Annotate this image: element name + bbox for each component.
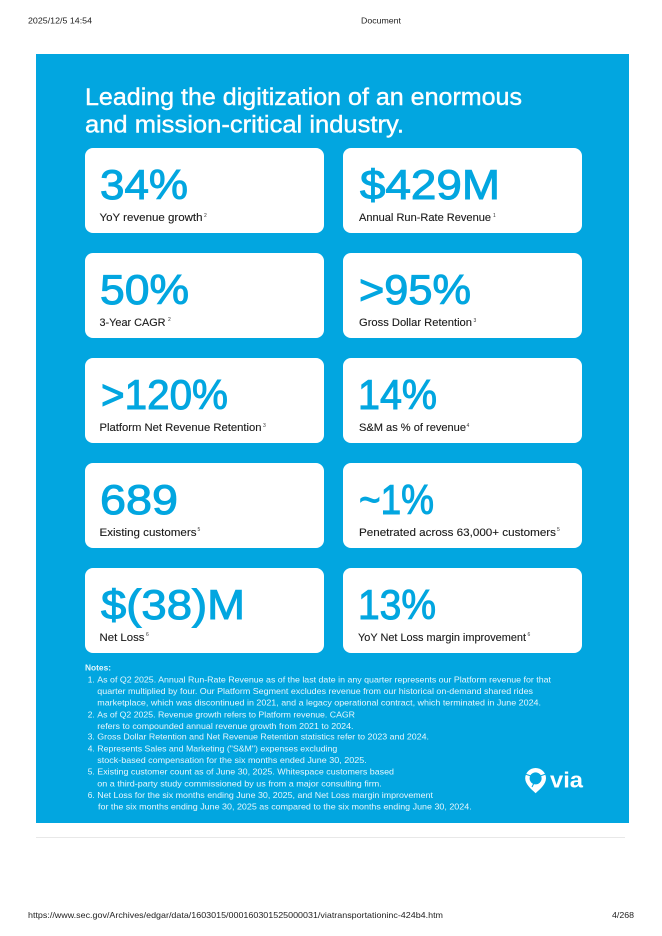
icon: via logo bbox=[525, 768, 584, 793]
notes: 2. bbox=[88, 709, 95, 719]
stat card: net loss margin improvement: 6 bbox=[528, 632, 530, 638]
stat card: existing customers bbox=[85, 463, 324, 548]
notes: stock-based compensation for the six months ended June 30, 2025. bbox=[97, 755, 367, 765]
stat card: S&M as % of revenue: S&M as % of revenue bbox=[359, 422, 466, 434]
stat card: net loss: 6 bbox=[146, 632, 149, 638]
stat card: platform net revenue retention: >120% bbox=[101, 371, 228, 418]
notes bbox=[85, 662, 552, 812]
print header: 2025/12/5 14:54 bbox=[28, 16, 92, 26]
stat card: existing customers: Existing customers bbox=[100, 527, 196, 539]
stat card: annual run-rate revenue bbox=[343, 148, 582, 233]
stat card: platform net revenue retention: Platform Net Revenue Retention bbox=[100, 422, 262, 434]
stat card: net loss margin improvement: 13% bbox=[358, 581, 436, 628]
stat card: YoY revenue growth: 2 bbox=[204, 213, 207, 219]
notes: for the six months ending June 30, 2025 as compared to the six months ending June 30, 2024. bbox=[98, 802, 472, 812]
notes: refers to compounded annual revenue growth from 2021 to 2024. bbox=[97, 721, 354, 731]
print header: Document bbox=[361, 16, 402, 26]
notes: 4. bbox=[88, 743, 95, 753]
notes: Represents Sales and Marketing ("S&M") expenses excluding bbox=[97, 743, 338, 753]
notes: As of Q2 2025. Annual Run-Rate Revenue as of the last date in any quarter represents our Platform revenue for that bbox=[97, 674, 552, 684]
stat card: net loss margin improvement: YoY Net Loss margin improvement bbox=[358, 632, 526, 644]
stat card: 3-year CAGR: 2 bbox=[168, 317, 171, 323]
stat card: penetration: 5 bbox=[557, 527, 560, 533]
notes: Existing customer count as of June 30, 2025. Whitespace customers based bbox=[97, 767, 394, 777]
print footer: https://www.sec.gov/Archives/edgar/data/1603015/000160301525000031/viatransportationinc-424b4.htm bbox=[28, 910, 443, 920]
stat card: YoY revenue growth: 34% bbox=[100, 161, 188, 208]
notes: As of Q2 2025. Revenue growth refers to Platform revenue. CAGR bbox=[97, 709, 355, 719]
stat card: gross dollar retention: 3 bbox=[474, 318, 476, 324]
print footer bbox=[28, 910, 634, 920]
stat card: net loss margin improvement bbox=[343, 568, 582, 653]
notes: 6. bbox=[88, 790, 95, 800]
stat card: net loss: Net Loss bbox=[100, 632, 144, 644]
notes: 5. bbox=[88, 767, 95, 777]
stat card: existing customers: 689 bbox=[100, 476, 178, 523]
print footer: 4/268 bbox=[612, 910, 634, 920]
stat card: YoY revenue growth bbox=[85, 148, 324, 233]
stat card: 3-year CAGR bbox=[85, 253, 324, 338]
notes: 1. bbox=[88, 674, 95, 684]
stat card: gross dollar retention bbox=[343, 253, 582, 338]
stat card: annual run-rate revenue: 1 bbox=[493, 213, 496, 219]
print header bbox=[28, 16, 402, 26]
stat card: annual run-rate revenue: $429M bbox=[360, 161, 500, 208]
notes: marketplace, which was discontinued in 2021, and a legacy operational contract, which terminated in June 2024. bbox=[97, 698, 541, 708]
stat card: net loss bbox=[85, 568, 324, 653]
stat card: gross dollar retention: >95% bbox=[359, 266, 471, 313]
stat card: YoY revenue growth: YoY revenue growth bbox=[100, 212, 203, 224]
notes: Net Loss for the six months ending June 30, 2025, and Net Loss margin improvement bbox=[97, 790, 434, 800]
notes: Gross Dollar Retention and Net Revenue Retention statistics refer to 2023 and 2024. bbox=[97, 732, 429, 742]
stat card: gross dollar retention: Gross Dollar Retention bbox=[359, 317, 472, 329]
notes: quarter multiplied by four. Our Platform Segment excludes revenue from our historical on-demand shared rides bbox=[97, 686, 533, 696]
stat card: 3-year CAGR: 50% bbox=[100, 266, 189, 313]
panel: blue background bbox=[36, 54, 629, 823]
stat card: S&M as % of revenue: 4 bbox=[466, 423, 470, 429]
title bbox=[85, 84, 522, 138]
notes: Notes: bbox=[85, 662, 111, 672]
title: Leading the digitization of an enormous bbox=[85, 84, 522, 111]
notes: 3. bbox=[88, 732, 95, 742]
stat card: existing customers: 5 bbox=[198, 527, 200, 533]
stat card: 3-year CAGR: 3-Year CAGR bbox=[100, 317, 166, 329]
notes: on a third-party study commissioned by us from a major consulting firm. bbox=[97, 778, 382, 788]
stat card: net loss: $(38)M bbox=[101, 581, 245, 628]
stat card: penetration: ~1% bbox=[359, 476, 434, 523]
stat card: penetration bbox=[343, 463, 582, 548]
stat card: annual run-rate revenue: Annual Run-Rate Revenue bbox=[359, 212, 491, 224]
icon: via logo: via bbox=[550, 768, 584, 792]
stat card: penetration: Penetrated across 63,000+ customers bbox=[359, 527, 556, 539]
stat card: S&M as % of revenue bbox=[343, 358, 582, 443]
stat card: platform net revenue retention bbox=[85, 358, 324, 443]
title: and mission-critical industry. bbox=[85, 112, 404, 138]
stat card: platform net revenue retention: 3 bbox=[263, 423, 266, 429]
stat card: S&M as % of revenue: 14% bbox=[358, 371, 437, 418]
